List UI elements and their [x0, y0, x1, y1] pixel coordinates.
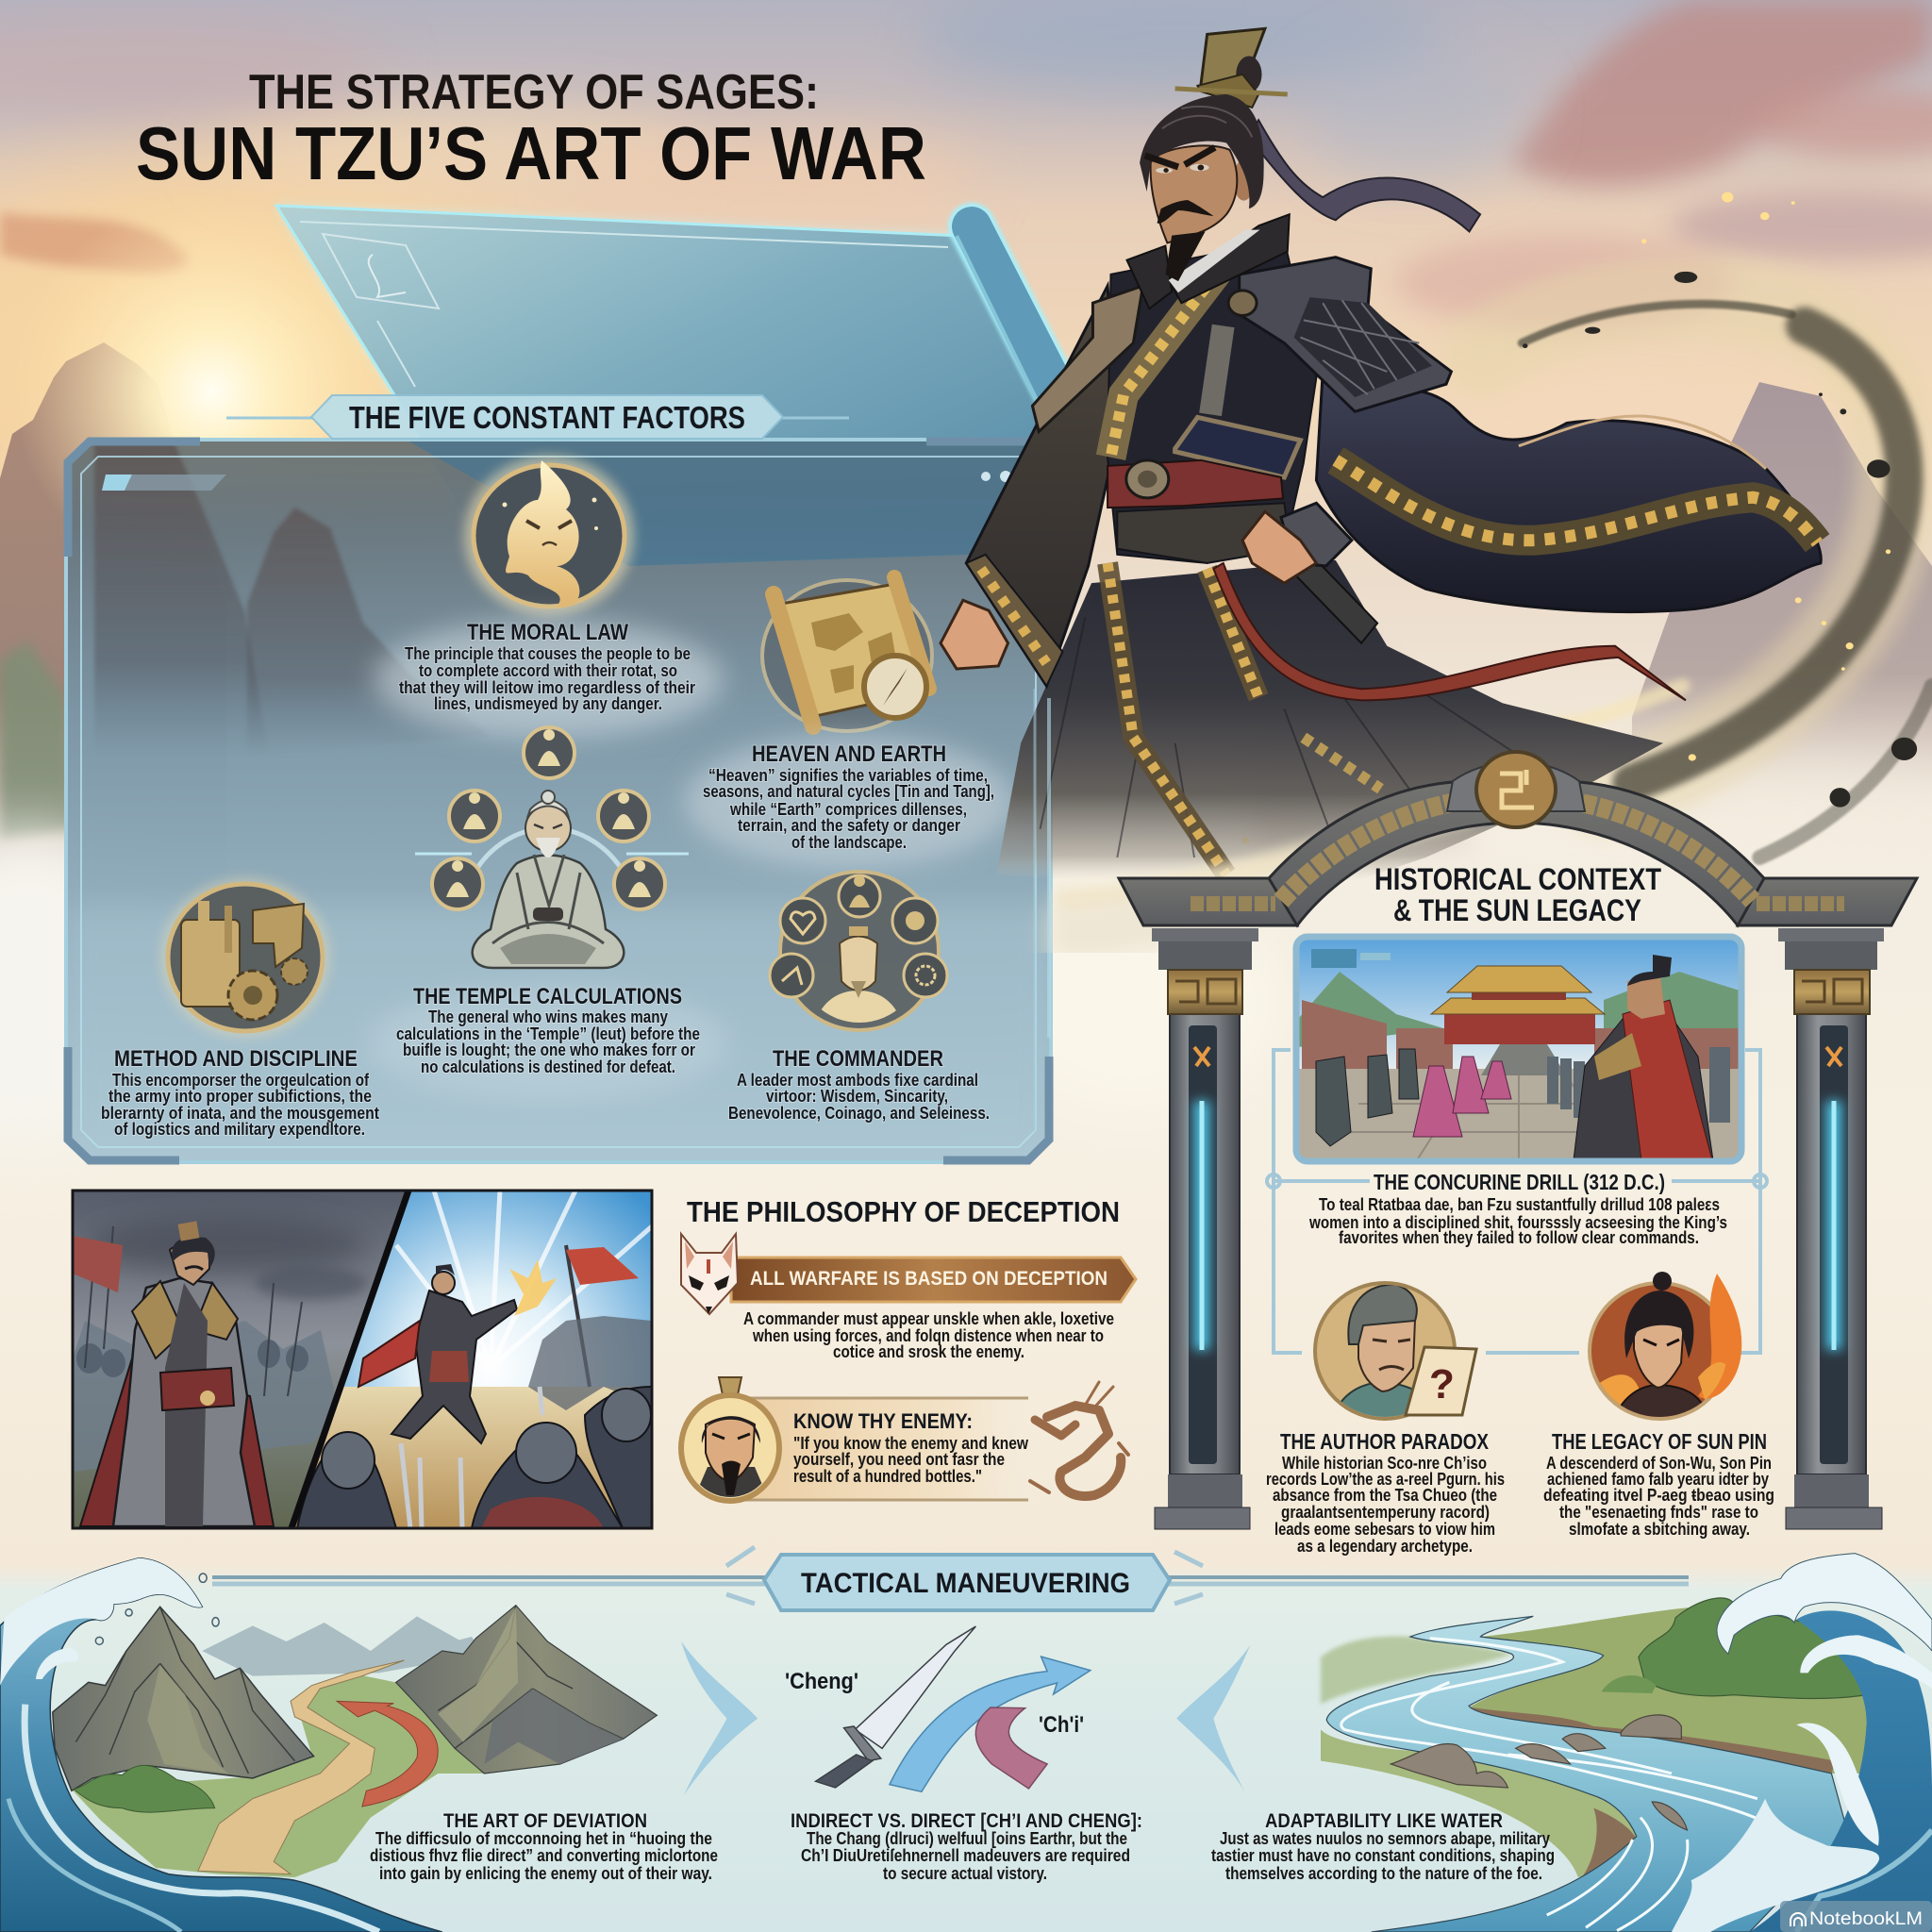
text: the art of deviation: distious fhvz flie direct” and converting miclortone — [370, 1846, 718, 1865]
text: method and discipline — [101, 1046, 379, 1139]
illustration: winding river — [1326, 1616, 1847, 1932]
text: the author paradox: absance from the Tsa Chueo (the — [1273, 1486, 1497, 1505]
text: deception description: when using forces, and folqn distence when near to — [752, 1326, 1104, 1345]
text: the author paradox: While historian Sco-nre Ch’iso — [1282, 1454, 1487, 1473]
heading: historical context: HISTORICAL CONTEXT — [1374, 862, 1661, 896]
head — [1201, 28, 1265, 89]
arch lintel and band — [1119, 782, 1917, 925]
text: adaptability like water: ADAPTABILITY LIKE WATER — [1265, 1810, 1503, 1832]
banner: all warfare is based on deception: ALL WARFARE IS BASED ON DECEPTION — [750, 1268, 1108, 1290]
illustration: far bank — [1321, 1637, 1512, 1705]
heading: historical context: & THE SUN LEGACY — [1393, 893, 1641, 927]
callout: know thy enemy — [681, 1377, 1051, 1501]
text: the temple calculations: calculations in the ‘Temple” (leut) before the — [396, 1024, 700, 1043]
holographic scroll — [276, 206, 1066, 566]
text: concubine drill: To teal Rtatbaa dae, ban Fzu sustantfully drillud 108 paleεs — [1319, 1195, 1720, 1214]
text: the art of deviation: THE ART OF DEVIATION — [443, 1810, 647, 1832]
left comic half: calm general — [73, 1191, 412, 1530]
text: heaven and earth: seasons, and natural cycles [Tin and Tang], — [703, 782, 994, 801]
text: indirect vs direct — [791, 1810, 1142, 1883]
text: indirect vs direct: to secure actual vistory. — [883, 1864, 1047, 1883]
text: the moral law — [374, 620, 723, 738]
arch pillars — [1152, 928, 1884, 1529]
text: the author paradox: leads eome sebesars to viow him — [1274, 1520, 1495, 1539]
illustration: distant peaks — [202, 1616, 484, 1676]
text: the legacy of sun pin: achiened famo falb yearu idter by — [1547, 1470, 1769, 1489]
callout: know thy enemy: KNOW THY ENEMY: — [793, 1409, 973, 1433]
text: the commander: virtoor: Wisdem, Sincarity, — [766, 1087, 948, 1106]
watermark: NotebookLM — [1780, 1901, 1932, 1932]
arrow: blue Cheng arrow — [890, 1657, 1091, 1791]
section: right landscape with river and wave — [1321, 1554, 1932, 1932]
panel corner brackets — [68, 441, 1049, 1160]
hero: Sun Tzu figure with swirling ink — [941, 28, 1932, 896]
illustration: green valley — [72, 1673, 484, 1877]
text: indirect vs direct: The Chang (dlruci) welfuul [oins Earthr, but the — [807, 1829, 1127, 1848]
icon: portrait of Sun Tzu — [681, 1377, 779, 1501]
text: method and discipline: of logistics and military expendltore. — [114, 1120, 365, 1139]
icon: historian portrait with scroll: ? — [1429, 1361, 1455, 1407]
illustration: river foam — [1341, 1639, 1769, 1931]
icon: method and discipline — [160, 877, 330, 1038]
heading: the five constant factors: THE FIVE CONSTANT FACTORS — [349, 400, 745, 435]
text: the temple calculations: no calculations is destined for defeat. — [421, 1058, 675, 1076]
text: the moral law: to complete accord with their rotat, so — [419, 661, 677, 680]
text: the legacy of sun pin: slmofate a sbitching away. — [1569, 1520, 1750, 1539]
illustration: forest — [1639, 1598, 1867, 1698]
heading: tactical maneuvering banner — [212, 1547, 1689, 1610]
text: the art of deviation: The difficsulo of mcconnoing het in “huoing the — [375, 1829, 712, 1848]
belt — [1175, 417, 1300, 477]
illustration: winding path — [198, 1660, 405, 1874]
text: deception description: A commander must appear unskle when akle, loxetive — [743, 1309, 1114, 1328]
heading: historical context — [1374, 862, 1661, 927]
title: THE STRATEGY OF SAGES: — [249, 65, 819, 120]
text: the author paradox: as a legendary archetype. — [1297, 1537, 1473, 1556]
illustration: left wave — [0, 1558, 442, 1932]
torso — [1108, 241, 1316, 563]
text: the legacy of sun pin — [1543, 1429, 1774, 1539]
icon: sword — [816, 1626, 975, 1788]
illustration: far meadow — [1469, 1607, 1867, 1774]
text: the commander — [728, 1046, 990, 1123]
callout: know thy enemy: "If you know the enemy and knew — [793, 1434, 1029, 1453]
icon: moral law flame spirit — [464, 456, 634, 616]
red sash — [1213, 563, 1686, 700]
left sleeve — [966, 286, 1117, 686]
ink swirl — [1483, 298, 1932, 858]
text: heaven and earth: terrain, and the safety or danger — [738, 816, 960, 835]
panel: comic deception scene — [73, 1191, 656, 1530]
text: deception description — [743, 1309, 1114, 1361]
robe skirt — [996, 560, 1663, 896]
text: adaptability like water — [1211, 1810, 1555, 1883]
heading: the five constant factors — [226, 395, 849, 439]
text: heaven and earth: while “Earth” comprices dillenses, — [729, 800, 967, 819]
text: the moral law: THE MORAL LAW — [467, 620, 628, 645]
text: method and discipline: This encomporser the orgeulcation of — [112, 1071, 370, 1090]
text: the moral law: that they will leitow imo regardless of their — [399, 678, 695, 697]
text: the commander: THE COMMANDER — [773, 1046, 943, 1072]
arrow: red deviation arrow — [337, 1701, 438, 1807]
arrow: right chevron — [1176, 1644, 1251, 1795]
callout: know thy enemy: yourself, you need ont fasr the — [793, 1450, 1005, 1469]
illustration: river bank earth — [1471, 1707, 1836, 1877]
text: the temple calculations: buifle is lought; the one who makes forr or — [403, 1041, 695, 1059]
icon: temple calculations sage and medallions — [415, 727, 689, 968]
text: adaptability like water: tastier must have no constant conditions, shaping — [1211, 1846, 1555, 1865]
text: the art of deviation: into gain by enlicing the enemy out of their way. — [379, 1864, 712, 1883]
text: heaven and earth: HEAVEN AND EARTH — [752, 741, 946, 767]
text: adaptability like water: themselves according to the nature of the foe. — [1225, 1864, 1542, 1883]
text: the legacy of sun pin: the "esenaeting fnds" rase to — [1559, 1503, 1758, 1522]
labels: Cheng and Ch'i: 'Cheng' — [785, 1669, 858, 1694]
title — [136, 65, 926, 195]
panel: historical context arch — [1119, 752, 1917, 1556]
text: method and discipline: the army into proper subifictions, the — [108, 1087, 372, 1106]
icon: dragon — [1030, 1382, 1128, 1496]
text: adaptability like water: Just as wates nuulos no semnoɾs abape, military — [1220, 1829, 1550, 1848]
illustration: right mountain — [396, 1606, 657, 1774]
text: the commander: A leader most ambods fixe cardinal — [737, 1071, 978, 1090]
text: the author paradox: THE AUTHOR PARADOX — [1280, 1429, 1490, 1454]
text: the commander: Benevolence, Coinago, and Seleiness. — [728, 1104, 990, 1123]
text: the legacy of sun pin: A descenderd of Son-Wu, Son Pin — [1546, 1454, 1772, 1473]
heading: the philosophy of deception: THE PHILOSOPHY OF DECEPTION — [687, 1195, 1120, 1228]
section: centre diagram of Cheng and Ch'i — [681, 1626, 1251, 1795]
text: the moral law: lines, undismeyed by any danger. — [434, 694, 662, 713]
title: SUN TZU’S ART OF WAR — [136, 111, 926, 195]
illustration: left mountain — [53, 1607, 314, 1790]
icon: the commander with five virtues — [770, 872, 947, 1030]
text: the art of deviation — [370, 1810, 718, 1883]
right pauldron with lattice armour — [1240, 258, 1451, 411]
text: concubine drill — [1308, 1170, 1727, 1247]
text: the temple calculations — [369, 984, 727, 1099]
text: concubine drill: women into a disciplined shit, foursssly acseesing the King’s — [1308, 1213, 1727, 1232]
text: concubine drill: THE CONCURINE DRILL (312 D.C.) — [1374, 1170, 1665, 1194]
icon: fox mask — [681, 1234, 738, 1314]
connector lines — [1267, 1050, 1767, 1353]
arrow: pink Chi arrow — [975, 1707, 1047, 1789]
icon: Sun Pin portrait with flames — [1590, 1272, 1741, 1424]
illustration: near bank — [1321, 1729, 1637, 1877]
illustration: rocks — [1391, 1715, 1688, 1830]
right comic half: sudden strike — [283, 1191, 656, 1530]
hand and vambrace — [1281, 503, 1352, 566]
banner: all warfare is based on deception — [731, 1257, 1136, 1302]
icon: map and compass — [762, 577, 932, 731]
text: the temple calculations: The general who wins makes many — [428, 1008, 668, 1026]
illustration: right wave — [1672, 1554, 1932, 1932]
labels: Cheng and Ch'i: 'Ch'i' — [1039, 1712, 1084, 1738]
scene: palace courtyard drill — [1296, 937, 1741, 1163]
icon: historian portrait with scroll — [1315, 1283, 1476, 1424]
text: the temple calculations: THE TEMPLE CALCULATIONS — [413, 984, 682, 1009]
panel: the five constant factors — [66, 395, 1052, 1170]
right sleeve — [1316, 372, 1821, 611]
text: the author paradox: graalantsentemperuny racord) — [1281, 1503, 1490, 1522]
labels: Cheng and Ch'i — [785, 1669, 1084, 1738]
illustration: trees — [74, 1765, 215, 1812]
sword scabbard and handle — [1201, 464, 1377, 643]
arch crown medallion — [1447, 752, 1585, 827]
text: the legacy of sun pin: THE LEGACY OF SUN PIN — [1552, 1429, 1767, 1454]
mist: golden fog across the robe hem — [1035, 689, 1472, 1132]
text: indirect vs direct: Ch’I DiuUretiſehnernell madeuvers are required — [801, 1846, 1130, 1865]
text: heaven and earth — [684, 736, 1014, 868]
section: left landscape with wave, mountains and path — [0, 1558, 657, 1932]
arrow: left chevron — [681, 1641, 758, 1795]
text: deception description: cotice and srosk the enemy. — [833, 1342, 1024, 1361]
text: heaven and earth: of the landscape. — [791, 833, 907, 852]
text: heaven and earth: “Heaven” signifies the variables of time, — [708, 766, 988, 785]
heading: tactical maneuvering banner: TACTICAL MANEUVERING — [801, 1568, 1130, 1599]
text: method and discipline: blerarnty of inata, and the mousgement — [101, 1104, 379, 1123]
text: the legacy of sun pin: defeating itvel P-aeg ŧbeao using — [1543, 1486, 1774, 1505]
text: concubine drill: favorites when they failed to follow clear commands. — [1339, 1228, 1699, 1247]
left pauldron — [1032, 286, 1143, 432]
text: the author paradox: records Low’the as a-reel Pgurn. his — [1266, 1470, 1505, 1489]
text: method and discipline: METHOD AND DISCIPLINE — [114, 1046, 358, 1072]
text: the author paradox — [1266, 1429, 1505, 1556]
watermark: NotebookLM: NotebookLM — [1809, 1909, 1923, 1929]
text: the moral law: The principle that couses the people to be — [405, 644, 691, 663]
callout: know thy enemy: result of a hundred bottles." — [793, 1467, 982, 1486]
text: indirect vs direct: INDIRECT VS. DIRECT [CH’I AND CHENG]: — [791, 1810, 1142, 1832]
